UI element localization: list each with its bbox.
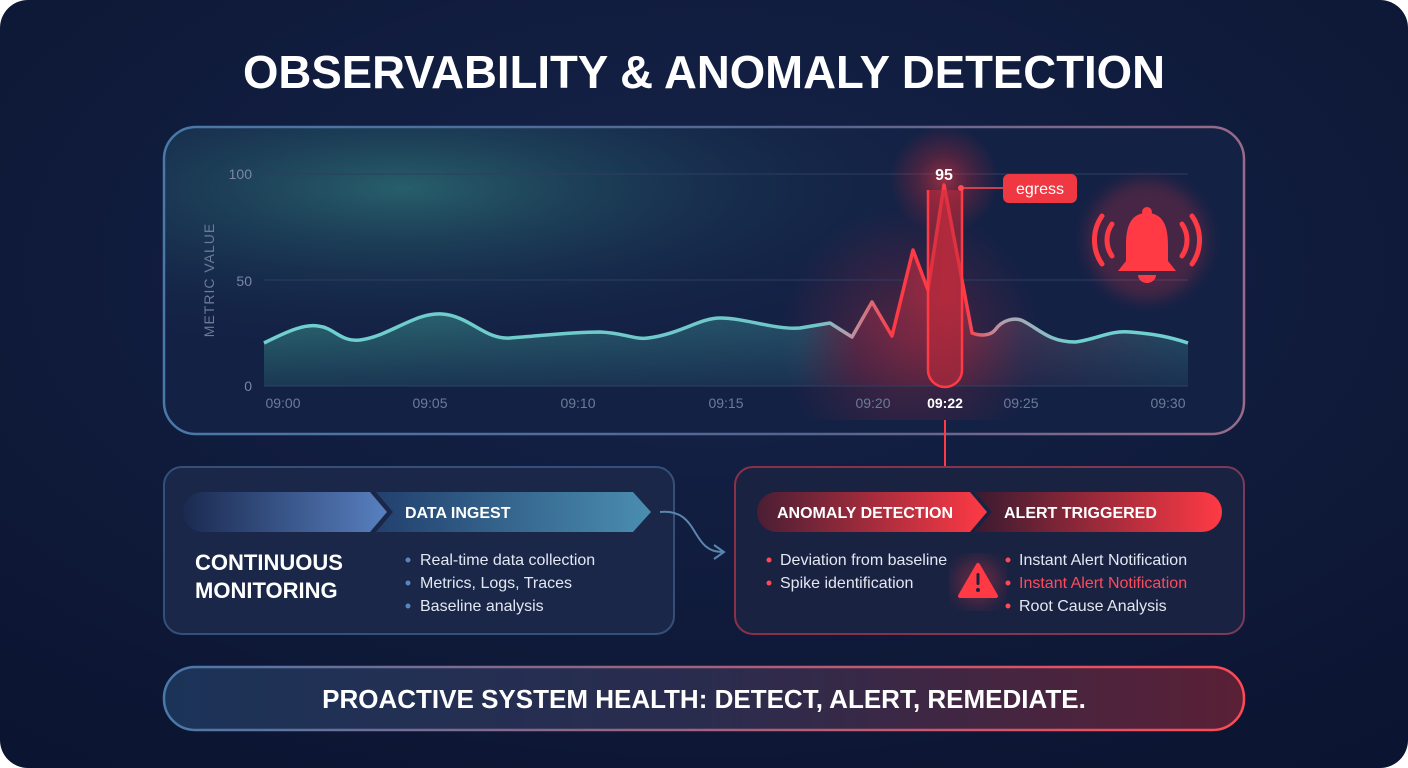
bullet list: detection bbox=[766, 552, 947, 592]
red glow around peak bbox=[889, 125, 999, 235]
panel: anomaly detection bbox=[735, 467, 1244, 634]
chevron: anomaly detection bbox=[757, 492, 987, 532]
metric line bbox=[264, 185, 1188, 343]
bullet list: alert: Instant Alert Notification bbox=[1019, 575, 1187, 592]
bullet list: detection: Spike identification bbox=[780, 575, 913, 592]
x axis labels: 09:20 bbox=[855, 395, 891, 411]
icon: alarm bell bbox=[1087, 180, 1207, 300]
bullet list: Real-time data collection bbox=[420, 552, 595, 569]
panel: chart bbox=[164, 125, 1244, 434]
y axis label: METRIC VALUE bbox=[201, 223, 217, 337]
panel: chart: 09:22 bbox=[927, 395, 963, 411]
connector: chart to anomaly panel bbox=[944, 420, 946, 467]
x axis labels: 09:10 bbox=[560, 395, 596, 411]
panel: continuous monitoring bbox=[164, 467, 674, 634]
chevron: data ingest bbox=[376, 492, 651, 532]
bullet list: alert: Root Cause Analysis bbox=[1019, 598, 1167, 615]
bullet list bbox=[406, 552, 595, 615]
x axis labels: 09:30 bbox=[1150, 395, 1186, 411]
panel: continuous monitoring: MONITORING bbox=[195, 578, 338, 603]
arrow: flow to anomaly panel bbox=[660, 512, 724, 559]
chevron: data ingest: DATA INGEST bbox=[405, 505, 511, 522]
bullet list: Metrics, Logs, Traces bbox=[420, 575, 572, 592]
y axis ticks: 50 bbox=[236, 273, 252, 289]
bullet list: alert: Instant Alert Notification bbox=[1019, 552, 1187, 569]
title: OBSERVABILITY & ANOMALY DETECTION bbox=[243, 46, 1165, 98]
spike highlight capsule bbox=[928, 190, 962, 387]
icon: warning triangle bbox=[954, 558, 1002, 606]
chevron: alert triggered: ALERT TRIGGERED bbox=[1004, 505, 1157, 522]
bullet list: alert bbox=[1006, 552, 1187, 615]
bullet list: Baseline analysis bbox=[420, 598, 544, 615]
y axis ticks bbox=[229, 166, 252, 394]
x axis labels bbox=[265, 395, 1186, 411]
chevron: blank bbox=[183, 492, 387, 532]
callout: egress: egress bbox=[1016, 181, 1064, 198]
bullet list: detection: Deviation from baseline bbox=[780, 552, 947, 569]
footer banner bbox=[164, 667, 1244, 730]
x axis labels: 09:00 bbox=[265, 395, 301, 411]
x axis labels: 09:25 bbox=[1003, 395, 1039, 411]
x axis labels: 09:15 bbox=[708, 395, 744, 411]
heading: continuous monitoring: CONTINUOUS bbox=[195, 550, 343, 575]
y axis ticks: 0 bbox=[244, 378, 252, 394]
area chart bbox=[264, 185, 1188, 386]
y axis ticks: 100 bbox=[229, 166, 252, 182]
x axis labels: 09:05 bbox=[412, 395, 448, 411]
footer banner: PROACTIVE SYSTEM HEALTH: DETECT, ALERT, REMEDIATE. bbox=[322, 684, 1086, 714]
chevron: anomaly detection: ANOMALY DETECTION bbox=[777, 505, 953, 522]
peak value: 95 bbox=[935, 167, 953, 184]
callout: egress bbox=[958, 174, 1077, 203]
chevron: alert triggered bbox=[975, 492, 1222, 532]
